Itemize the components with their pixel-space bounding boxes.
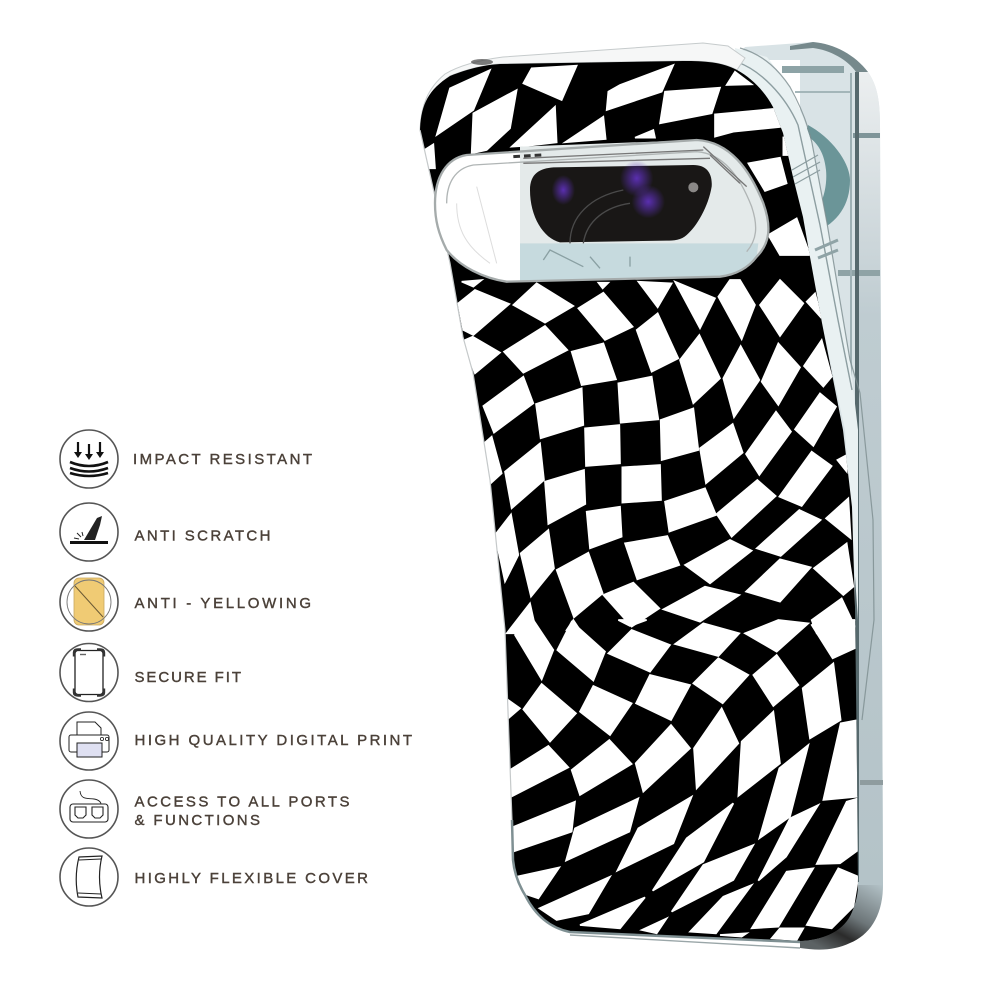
feature: secure fit: SECURE FIT — [134, 669, 241, 686]
feature: impact resistant: IMPACT RESISTANT — [133, 451, 312, 468]
feature: high quality digital print: HIGH QUALITY DIGITAL PRINT — [134, 732, 412, 749]
icon: phone with bumpers — [60, 644, 118, 702]
camera ring on phone — [795, 125, 850, 240]
lower pattern cells — [508, 620, 858, 940]
feature: anti scratch: ANTI SCRATCH — [134, 528, 270, 544]
upper pattern cells — [422, 66, 606, 168]
camera lens — [530, 165, 712, 242]
icon: blade on surface — [60, 503, 118, 561]
icon: flexible case — [60, 848, 118, 906]
camera bump — [435, 140, 768, 282]
icon: yellow case crossed — [60, 573, 118, 631]
feature list — [60, 430, 412, 906]
case top rim — [420, 43, 745, 130]
wavy checkered pattern — [410, 50, 870, 950]
icon: impact arrows — [60, 430, 118, 488]
feature: highly flexible cover — [60, 848, 368, 906]
case edge outlines — [420, 59, 883, 950]
feature: anti scratch — [60, 503, 270, 561]
feature: access to all ports and functions: ACCESS TO ALL PORTS — [134, 794, 350, 810]
feature: impact resistant — [60, 430, 312, 488]
icon: ports — [60, 780, 118, 838]
feature: anti yellowing: ANTI - YELLOWING — [134, 595, 311, 612]
phone body behind case — [735, 42, 883, 885]
feature: high quality digital print — [60, 712, 412, 770]
feature: access to all ports and functions — [60, 780, 350, 838]
icon: printer — [60, 712, 118, 770]
transparent case side band — [735, 48, 874, 720]
feature: anti yellowing — [60, 573, 311, 631]
feature: access to all ports and functions: & FUNCTIONS — [134, 812, 260, 829]
feature: secure fit — [60, 644, 241, 702]
feature: highly flexible cover: HIGHLY FLEXIBLE COVER — [134, 870, 368, 887]
middle pattern cells — [458, 280, 855, 633]
